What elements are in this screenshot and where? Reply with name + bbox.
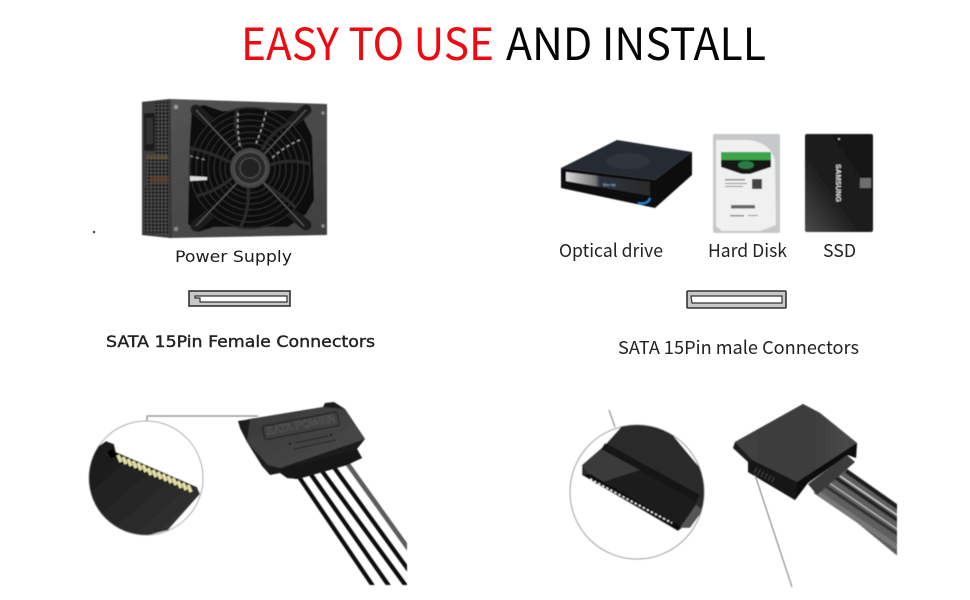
icon: female connector with wires [238, 402, 420, 586]
fan [188, 105, 314, 232]
labels: drives: Optical drive [559, 237, 663, 263]
labels: drives: Hard Disk [708, 237, 787, 263]
icon: optical drive: Blu-ray [603, 182, 616, 187]
title [241, 9, 766, 73]
callout: male connector detail [570, 410, 710, 559]
labels: drives [559, 237, 856, 263]
icon: optical drive [561, 140, 692, 208]
icon: power supply [142, 99, 327, 238]
label: power supply: Power Supply [175, 247, 292, 266]
label: male connectors: SATA 15Pin male Connectors [618, 334, 859, 360]
icon: male connector with wires [733, 404, 900, 587]
icon: female connector outline [189, 291, 290, 306]
speck [93, 231, 95, 233]
label: female connectors: SATA 15Pin Female Connectors [106, 332, 375, 351]
icon: ssd [805, 134, 873, 232]
title: AND INSTALL [506, 9, 766, 73]
icon: ssd: SAMSUNG [834, 164, 843, 202]
icon: male connector outline [687, 291, 786, 308]
icon: hard disk [713, 134, 780, 233]
label: embossed connector text: SATA POWER [265, 413, 337, 438]
title: EASY TO USE [241, 9, 494, 73]
labels: drives: SSD [823, 237, 856, 263]
callout: female connector detail [80, 416, 258, 545]
